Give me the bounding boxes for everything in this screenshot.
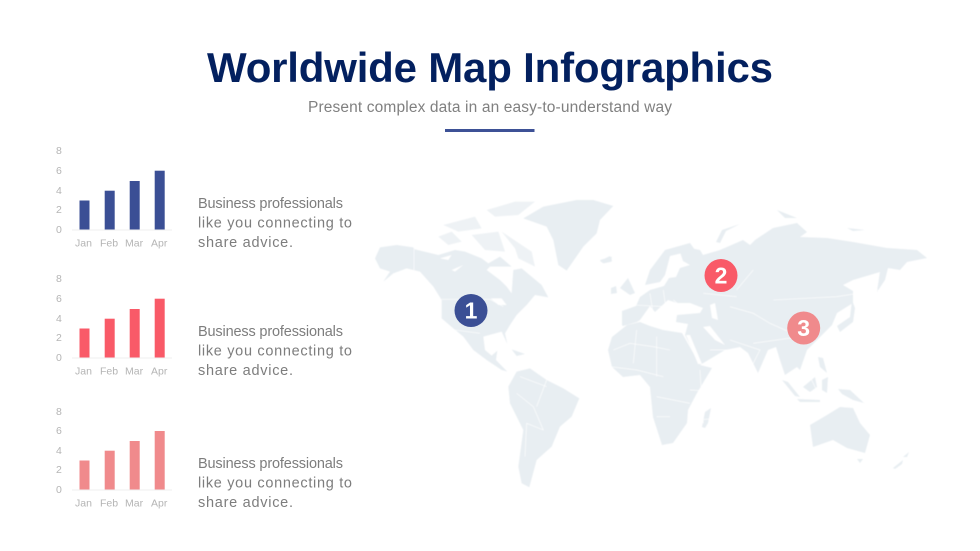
text block 3: [198, 456, 352, 511]
title: Worldwide Map Infographics: [207, 44, 773, 91]
bar chart 3: Jan: [75, 498, 92, 510]
text block 3: share advice.: [198, 495, 293, 511]
bar chart 1: Jan: [75, 238, 92, 250]
bar chart 3: Apr: [151, 498, 168, 510]
bar chart 2: Feb: [100, 366, 118, 378]
text block 1: Business professionals: [198, 196, 343, 212]
bar chart 1: 6: [56, 165, 62, 177]
bar chart 2: Mar: [125, 366, 144, 378]
bar chart 3: Feb: [100, 498, 118, 510]
bar chart 2: 0: [56, 352, 62, 364]
bar chart 1: 4: [56, 185, 62, 197]
bar chart 3: 2: [56, 464, 62, 476]
world map: [375, 200, 927, 487]
bar chart 1: Mar: [125, 238, 144, 250]
marker 2: 2: [715, 262, 727, 288]
bar chart 2: 2: [56, 332, 62, 344]
text block 2: [198, 324, 352, 379]
title underline: [445, 129, 534, 132]
bar chart 3: 8: [56, 406, 62, 418]
text block 1: like you connecting to: [198, 216, 352, 232]
text block 3: like you connecting to: [198, 476, 352, 492]
bar chart 1: Apr: [151, 238, 168, 250]
marker 3: [787, 312, 820, 344]
bar chart 1: Feb: [100, 238, 118, 250]
text block 1: [198, 196, 352, 251]
bar chart 3: 6: [56, 425, 62, 437]
map: country borders: [414, 247, 920, 457]
bar chart 2: Apr: [151, 366, 168, 378]
bar chart 2: [56, 273, 172, 378]
subtitle: Present complex data in an easy-to-understand way: [308, 99, 672, 116]
bar chart 1: 0: [56, 224, 62, 236]
marker 3: 3: [797, 315, 810, 341]
bar chart 3: Mar: [125, 498, 144, 510]
map: Europe, Asia, Africa, Oceania: [600, 210, 927, 469]
bar chart 2: 6: [56, 293, 62, 305]
bar chart 2: 8: [56, 273, 62, 285]
bar chart 2: Jan: [75, 366, 92, 378]
marker 1: [454, 294, 488, 327]
bar chart 2: 4: [56, 313, 62, 325]
text block 2: share advice.: [198, 363, 293, 379]
bar chart 1: [56, 145, 172, 250]
bar chart 3: 4: [56, 445, 62, 457]
bar chart 1: 8: [56, 145, 62, 157]
marker 1: 1: [465, 298, 478, 324]
bar chart 3: 0: [56, 484, 62, 496]
text block 3: Business professionals: [198, 456, 343, 472]
text block 2: like you connecting to: [198, 344, 352, 360]
bar chart 1: 2: [56, 204, 62, 216]
text block 1: share advice.: [198, 235, 293, 251]
text block 2: Business professionals: [198, 324, 343, 340]
map: Americas and Greenland: [375, 200, 613, 487]
bar chart 3: [56, 406, 172, 510]
marker 2: [704, 259, 738, 292]
